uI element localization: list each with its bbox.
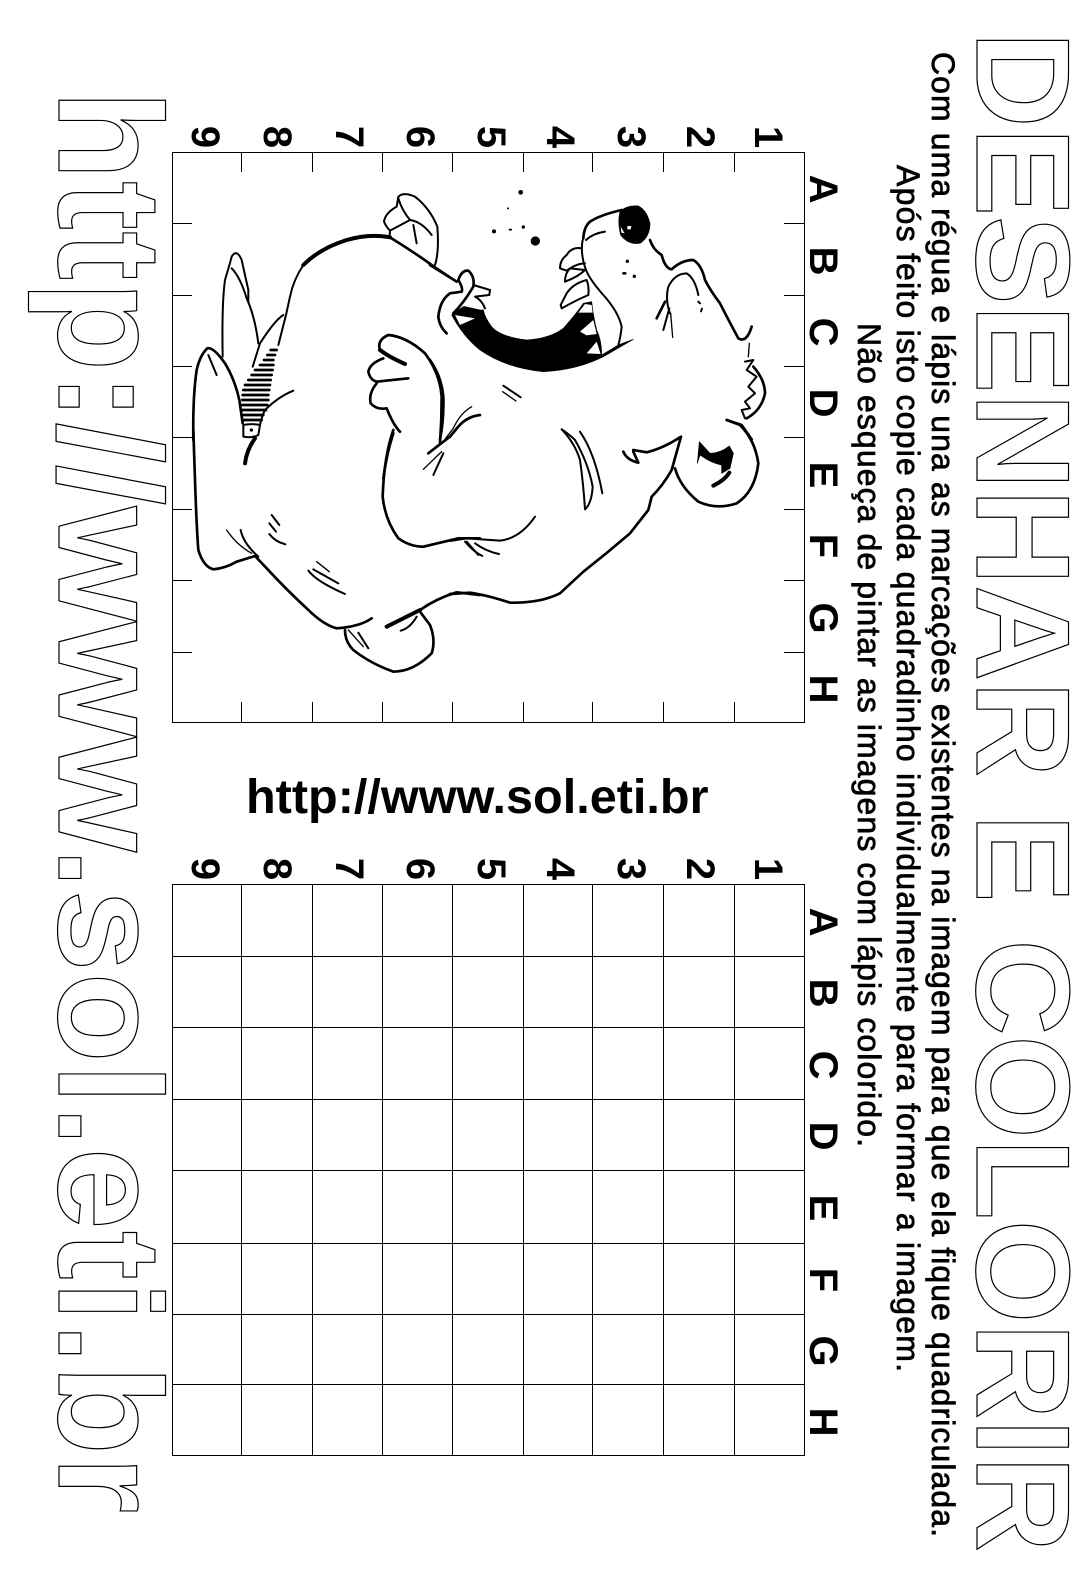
- number labels for drawing grid: [183, 858, 790, 881]
- letter labels for reference grid: C: [801, 318, 845, 346]
- letter labels for drawing grid: F: [801, 1268, 845, 1292]
- number labels for reference grid: 9: [183, 126, 227, 148]
- number labels for drawing grid: 4: [538, 858, 582, 881]
- letter labels for reference grid: H: [801, 675, 845, 703]
- letter labels for drawing grid: C: [801, 1051, 845, 1079]
- number labels for reference grid: [183, 126, 790, 149]
- letter labels for drawing grid: [801, 908, 845, 1436]
- letter labels for reference grid: B: [801, 247, 845, 275]
- number labels for reference grid: 3: [609, 126, 653, 148]
- letter labels for reference grid: D: [801, 389, 845, 417]
- empty drawing grid: [172, 884, 804, 1456]
- number labels for reference grid: 8: [255, 126, 299, 148]
- number labels for drawing grid: 6: [398, 858, 442, 880]
- number labels for drawing grid: 7: [327, 858, 371, 880]
- letter labels for reference grid: E: [801, 462, 845, 488]
- website address centered between grids: http://www.sol.eti.br: [246, 770, 709, 824]
- letter labels for drawing grid: D: [801, 1122, 845, 1150]
- number labels for drawing grid: 2: [678, 858, 722, 880]
- letter labels for drawing grid: E: [801, 1195, 845, 1221]
- number labels for reference grid: 7: [327, 126, 371, 148]
- number labels for reference grid: 1: [746, 126, 790, 148]
- letter labels for reference grid: G: [801, 602, 845, 634]
- reference grid frame with tick marks: [172, 152, 804, 722]
- number labels for drawing grid: 8: [255, 858, 299, 880]
- instructions text block: [851, 52, 961, 1537]
- bear hind leg and lower foot: [193, 430, 480, 672]
- letter labels for reference grid: A: [801, 175, 845, 203]
- letter labels for drawing grid: B: [801, 979, 845, 1007]
- illustration: rotated bear with open mouth: [193, 190, 765, 672]
- letter labels for reference grid: [801, 175, 845, 703]
- letter labels for drawing grid: H: [801, 1408, 845, 1436]
- bear belly, fold and ear: [450, 420, 758, 603]
- letter labels for drawing grid: A: [801, 908, 845, 936]
- number labels for drawing grid: 5: [469, 858, 513, 880]
- number labels for drawing grid: 9: [183, 858, 227, 880]
- letter labels for reference grid: F: [801, 534, 845, 558]
- number labels for drawing grid: 1: [746, 858, 790, 880]
- number labels for reference grid: 4: [538, 126, 582, 149]
- bear head and mouth: [430, 190, 765, 439]
- number labels for reference grid: 6: [398, 126, 442, 148]
- letter labels for drawing grid: G: [801, 1335, 845, 1367]
- instructions text block: Após feito isto copie cada quadradinho individualmente para formar a imagem.: [890, 165, 926, 1372]
- outlined website address: http://www.sol.eti.br: [27, 90, 191, 1514]
- instructions text block: Não esqueça de pintar as imagens com lápis colorido.: [851, 323, 887, 1147]
- number labels for reference grid: 2: [678, 126, 722, 148]
- number labels for reference grid: 5: [469, 126, 513, 148]
- number labels for drawing grid: 3: [609, 858, 653, 880]
- instructions text block: Com uma régua e lápis una as marcações existentes na imagem para que ela fique quadriculada.: [925, 52, 961, 1537]
- bear body top, paw, foot and hand: [193, 194, 450, 478]
